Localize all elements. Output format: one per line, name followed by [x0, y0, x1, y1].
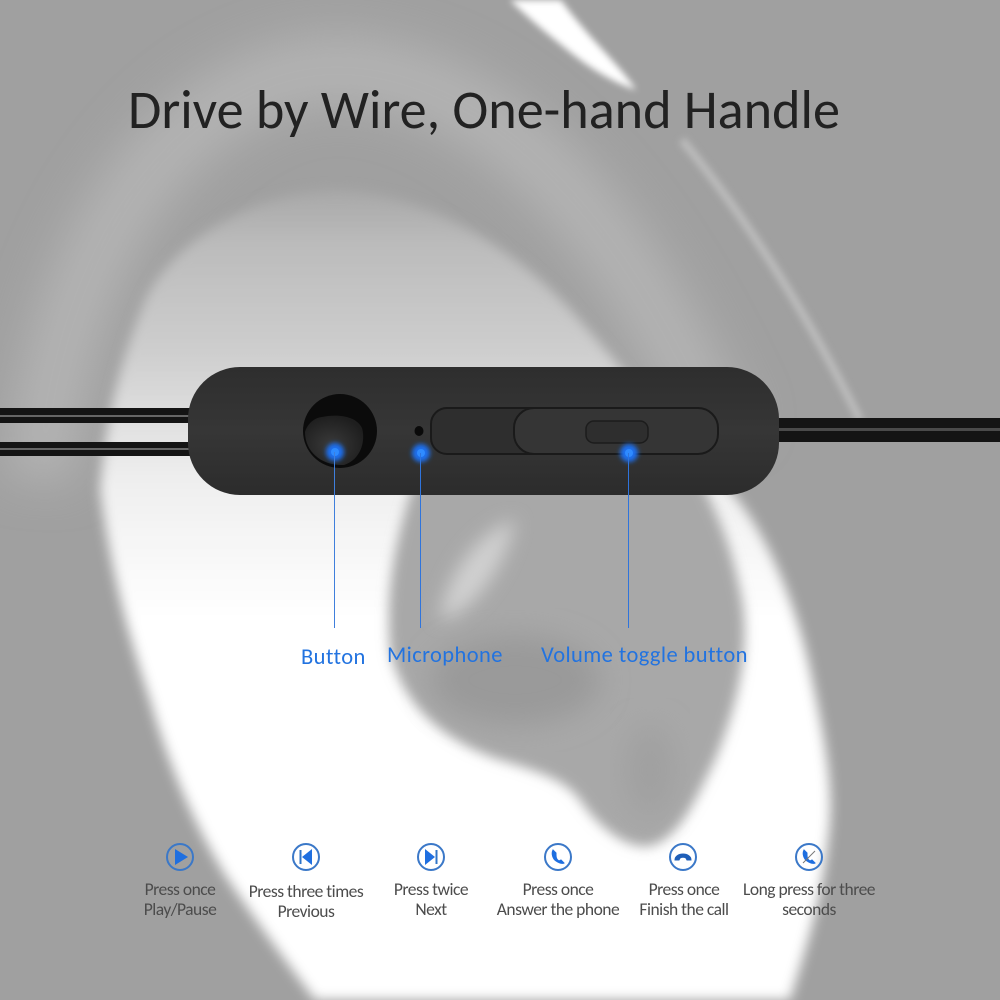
text: answer — [496, 878, 620, 920]
icon: previous — [293, 844, 319, 870]
text: finish: Press once — [649, 878, 719, 900]
label: volume toggle button: Volume toggle button — [541, 642, 748, 669]
left cables — [0, 408, 195, 456]
text: long press — [743, 878, 875, 920]
text: previous — [249, 880, 364, 922]
text: long press: Long press for three — [743, 878, 875, 900]
text: answer: Answer the phone — [497, 898, 619, 920]
text: play/pause: Play/Pause — [144, 898, 216, 920]
callout: volume toggle button — [620, 444, 638, 628]
text: long press: seconds — [782, 898, 836, 920]
label: microphone: Microphone — [387, 642, 503, 669]
microphone hole — [414, 426, 424, 436]
text: answer: Press once — [523, 878, 593, 900]
icon: reject call — [796, 844, 822, 870]
text: finish: Finish the call — [639, 898, 729, 920]
callout: button — [326, 443, 344, 628]
icon: answer phone — [545, 844, 571, 870]
right cable — [770, 418, 1000, 442]
text: next — [394, 878, 468, 920]
text: previous: Press three times — [249, 880, 363, 902]
icon: play — [167, 844, 193, 870]
icon: finish call — [670, 844, 696, 870]
text: next: Press twice — [394, 878, 468, 900]
volume rocker — [431, 408, 718, 454]
text: next: Next — [415, 898, 447, 920]
icon: next — [418, 844, 444, 870]
title: Drive by Wire, One-hand Handle — [128, 76, 840, 143]
inline remote body — [188, 367, 779, 495]
text: play/pause — [144, 878, 216, 920]
round button — [303, 394, 377, 468]
label: button: Button — [301, 644, 366, 671]
text: previous: Previous — [278, 900, 334, 922]
callout: microphone — [412, 444, 430, 628]
text: finish — [639, 878, 729, 920]
text: play/pause: Press once — [145, 878, 215, 900]
